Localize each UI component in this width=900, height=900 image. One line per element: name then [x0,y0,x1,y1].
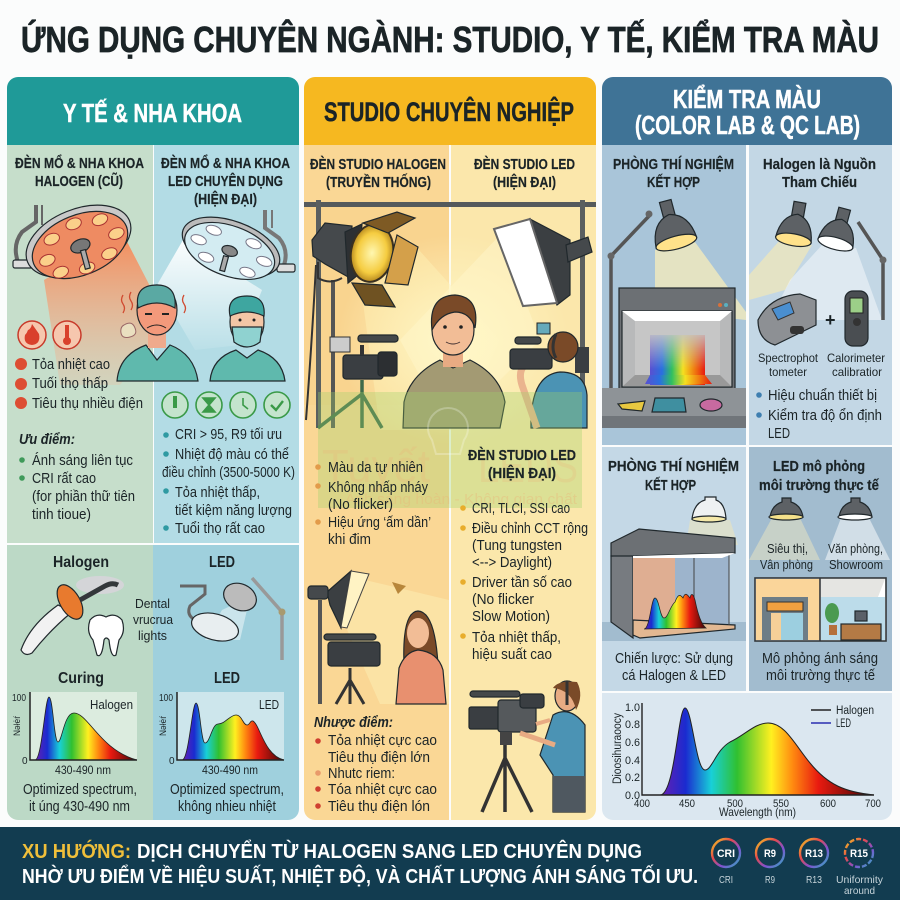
device labels: tometer [769,365,807,379]
heading: led surgical lamp: ĐÈN MỔ & NHA KHOA [161,154,290,172]
heading: halogen reference: Tham Chiếu [782,175,857,191]
heading: led simulation [759,459,880,494]
icon: twin reference lamps [749,199,886,320]
list: led studio advantages: (Tung tungsten [472,538,562,554]
list: halogen studio advantages: Không nhấp nháy [328,480,429,496]
icon: open light booth [602,497,746,641]
light beam: lab lamp [655,242,746,320]
label: dental lights: vrucrua [133,612,174,627]
list: halogen advantages [19,432,135,523]
chart: halogen curing spectrum [12,692,137,777]
list: halogen studio drawbacks: Tóa nhiệt cực cao [328,782,437,798]
heading: led studio repeat [468,447,576,482]
badge labels: Uniformity [836,874,884,886]
list: led studio advantages: CRI, TLCI, SSI cao [472,501,570,517]
icon: curing light [21,576,124,654]
icons: ceiling lamps [749,498,890,560]
axis labels: 400 [634,798,650,810]
label: dental lights: Dental [135,596,170,611]
list: led advantages: Tuổi thọ rất cao [175,521,265,537]
chart: halogen curing spectrum: 100 [12,693,26,704]
watermark [318,392,582,508]
lab desk with swatches [602,388,746,428]
icon: flame [18,321,46,349]
heading: halogen reference [763,157,876,191]
badge labels: CRI [717,848,735,860]
caption: led curing [170,782,284,815]
list: halogen studio drawbacks: Tiêu thụ điện lớn [328,750,430,766]
chart: led curing spectrum: 0 [169,756,175,767]
list: led studio advantages: Slow Motion) [472,609,550,625]
axis labels: Dioosihuraoocy [612,713,624,784]
lamp labels: Showroom [829,558,883,572]
heading: halogen studio: (TRUYỀN THỐNG) [326,173,431,191]
heading: halogen surgical lamp: ĐÈN MỔ & NHA KHOA [15,154,144,172]
heading: led studio [474,156,575,191]
chart: halogen curing spectrum: Halogen [90,698,133,712]
list: led studio advantages: hiệu suất cao [472,647,552,663]
heading: combined lab: KẾT HỢP [647,174,700,191]
list: led studio advantages: Điều chỉnh CCT rộng [472,521,588,537]
heading: combined lab second: PHÒNG THÍ NGHIỆM [608,457,739,475]
trend statement: DỊCH CHUYỂN TỪ HALOGEN SANG LED CHUYÊN DỤNG [137,839,642,863]
list: led studio advantages: (No flicker [472,592,534,608]
icon: tripod camera left [318,335,398,428]
badge labels: R9 [765,874,775,886]
heading: led studio: (HIỆN ĐẠI) [493,173,556,191]
sub-headings: spectra: Curing [58,670,104,687]
heading: halogen surgical lamp: HALOGEN (CŨ) [35,172,123,190]
icon: thermometer [53,321,81,349]
caption: strategy [615,651,733,684]
chart legend [811,705,874,730]
caption: led curing: không nhieu nhiệt [178,799,276,815]
list: halogen studio drawbacks: Tỏa nhiệt cực cao [328,733,437,749]
figure: presenter [403,295,505,428]
list: halogen studio drawbacks: Tiêu thụ điện lón [328,799,430,815]
list: halogen studio advantages: Màu da tự nhiên [328,460,423,476]
list: halogen advantages: CRI rất cao [32,471,96,487]
badge labels [717,848,884,897]
trend statement: XU HƯỚNG: [22,839,131,863]
device labels: calibratior [832,365,882,379]
caption: led curing: Optimized spectrum, [170,782,284,798]
device labels [758,351,885,379]
figure: cameraman right [510,323,589,428]
chart: led curing spectrum [158,692,284,777]
axis labels: 550 [773,798,789,810]
list: halogen studio drawbacks: Nhutc riem: [328,766,395,782]
badge labels: R13 [805,848,823,860]
panel header: studio [304,77,596,145]
chart: led curing spectrum: LED [259,698,279,712]
watermark: LEDS [478,440,578,492]
label: dental lights: lights [138,628,167,643]
panel header: y tế: Y TẾ & NHA KHOA [63,98,242,128]
list: halogen studio advantages: khi đim [328,532,371,548]
caption: strategy: Chiến lược: Sử dụng [615,651,733,667]
lamp labels: Văn phòng, [828,542,883,556]
heading: combined lab: PHÒNG THÍ NGHIỆM [613,155,734,173]
axis labels: 500 [727,798,743,810]
panel: kiểm tra màu [602,77,892,820]
list: halogen studio drawbacks [314,714,437,815]
axis labels: 0.4 [625,755,640,767]
icon: led dental lamp [180,578,286,660]
trend statement [22,839,698,888]
caption: halogen curing: it úng 430-490 nm [29,799,130,815]
icon: calorimeter [845,291,868,346]
plus sign: + [825,310,836,330]
figure: cameraman on tripod [469,681,585,812]
heading: combined lab second [608,457,739,494]
panel header: kiểm tra màu: KIỂM TRA MÀU [673,84,821,114]
light beam: halogen orange [44,232,152,385]
heading: led surgical lamp: LED CHUYÊN DỤNG [168,172,283,190]
axis labels: 0.6 [625,737,640,749]
icon: desk lamp [608,196,698,388]
list: led studio advantages: Driver tần số cao [472,575,572,591]
light glow on presenter [356,239,539,430]
chart legend: LED [836,718,851,730]
label: dental lights [133,596,174,643]
chart: led curing spectrum: Nəłėŕ [158,716,168,736]
list: reference uses [756,388,882,442]
list: led advantages: CRI > 95, R9 tối ưu [175,427,282,443]
heading: led studio repeat: ĐÈN STUDIO LED [468,447,576,464]
lamp labels: Vân phòng [760,558,813,572]
icon: spectrophotometer [758,294,816,345]
axis labels: 700 [865,798,881,810]
list: led advantages: Tỏa nhiệt thấp, [175,485,260,501]
heading: led studio: ĐÈN STUDIO LED [474,156,575,173]
icon: led surgical lamp [182,210,296,280]
list: led studio advantages [460,501,588,663]
list: halogen drawbacks: Tiêu thụ nhiều điện [32,396,143,412]
list: reference uses: Hiệu chuẩn thiết bị [768,388,877,404]
heading: combined lab [613,155,734,191]
heading: led simulation: môi trường thực tế [759,478,880,494]
icon: halogen surgical lamp [12,204,132,280]
icon: fresnel halogen lamp [306,212,418,428]
list: halogen advantages: tinh tioue) [32,507,91,523]
sub-headings: dental lights: Halogen [53,554,109,571]
heading: halogen studio [310,156,446,191]
caption: halogen curing [23,782,137,815]
axis labels: 1.0 [625,702,640,714]
scene: retail and office room [755,578,886,641]
figure: masked doctor [210,296,285,381]
axis labels: 450 [679,798,695,810]
list: halogen studio advantages: Hiệu ứng ‘ấm dần’ [328,515,431,531]
light beam: led white [157,240,262,350]
chart: led curing spectrum: 430-490 nm [202,765,258,777]
sub-headings: dental lights [54,556,234,570]
list: halogen drawbacks [15,357,143,412]
panel header: y tế [7,77,299,145]
device labels: Calorimeter [827,351,885,365]
badge labels: CRI [719,874,733,886]
heading: led simulation: LED mô phỏng [773,459,865,475]
heading: halogen reference: Halogen là Nguồn [763,157,876,173]
list: led advantages: Nhiệt độ màu có thể [175,447,289,463]
axis labels: 0.2 [625,772,640,784]
chart legend: Halogen [836,705,874,717]
panel: studio chuyên nghiệp [304,77,596,820]
list: halogen studio advantages [315,460,431,548]
sub-headings: spectra: LED [214,670,240,687]
axis labels: 600 [820,798,836,810]
axis labels: 0.0 [625,790,640,802]
list: led studio advantages: Tỏa nhiệt thấp, [472,630,561,646]
device labels: Spectrophot [758,351,819,365]
sub-headings: spectra [58,672,240,686]
lamp labels: Siêu thị, [767,542,808,556]
list: halogen studio advantages: (No flicker) [328,497,393,513]
panel: y tế & nha khoa [7,77,299,820]
list: halogen advantages: Ưu điểm: [19,432,75,448]
badge labels: R13 [806,874,822,886]
scene: softbox with woman [308,571,449,704]
icon: led softbox [494,219,592,306]
footer banner [0,827,900,900]
list: led advantages [162,427,295,537]
list: halogen drawbacks: Tuối thọ thấp [32,376,108,392]
chart: halogen curing spectrum: 430-490 nm [55,765,111,777]
list: led studio advantages: <--> Daylight) [472,555,552,571]
lamp labels [760,542,883,572]
list: halogen drawbacks: Tỏa nhiệt cao [32,357,110,373]
axis labels: 0.8 [625,719,640,731]
icons: led benefits [162,392,290,418]
heading: led surgical lamp: (HIỆN ĐẠI) [194,190,257,208]
list: halogen studio drawbacks: Nhược điểm: [314,714,393,731]
watermark: Ánh sáng hoàn - Không gian chất [345,491,578,508]
icon: light booth with spectrum [619,288,735,394]
heading: combined lab second: KẾT HỢP [645,477,696,494]
list: led advantages: điều chỉnh (3500-5000 K) [162,465,295,481]
list: reference uses: Kiểm tra độ ổn định [768,408,882,424]
axis labels [612,702,881,819]
heading: halogen surgical lamp [15,154,144,190]
list: halogen advantages: (for phiần thữ tiên [32,489,135,505]
list: halogen advantages: Ánh sáng liên tục [32,452,133,469]
chart: wavelength spectrum [612,702,881,819]
heading: led studio repeat: (HIỆN ĐẠI) [488,464,556,482]
watermark: Tuyết [322,440,430,492]
heading: halogen studio: ĐÈN STUDIO HALOGEN [310,156,446,173]
trend statement: NHỜ ƯU ĐIỂM VỀ HIỆU SUẤT, NHIỆT ĐỘ, VÀ CHẤT LƯỢNG ÁNH SÁNG TỐI ƯU. [22,864,698,888]
badges: quality metrics [712,839,873,867]
icon: tooth [89,615,123,656]
panel header: kiểm tra màu [602,77,892,145]
caption: halogen curing: Optimized spectrum, [23,782,137,798]
caption: strategy: cá Halogen & LED [622,668,726,684]
caption: simulation [762,651,878,684]
caption: simulation: môi trường thực tế [766,668,875,684]
badge labels: around [844,885,875,897]
chart: halogen curing spectrum: Nəłėŕ [12,716,22,736]
studio rail [304,200,596,428]
list: reference uses: LED [768,426,790,442]
badge labels: R9 [764,848,776,860]
axis labels: Wavelength (nm) [719,805,796,819]
sub-headings: dental lights: LED [209,554,235,571]
figure: overheated doctor [117,285,198,381]
chart: led curing spectrum: 100 [159,693,173,704]
list: led advantages: tiết kiệm năng lượng [175,503,292,519]
panel header: studio: STUDIO CHUYÊN NGHIỆP [324,96,574,127]
chart: halogen curing spectrum: 0 [22,756,28,767]
badge labels: R15 [850,848,868,860]
heading: led surgical lamp [161,154,290,208]
caption: simulation: Mô phỏng ánh sáng [762,651,878,667]
